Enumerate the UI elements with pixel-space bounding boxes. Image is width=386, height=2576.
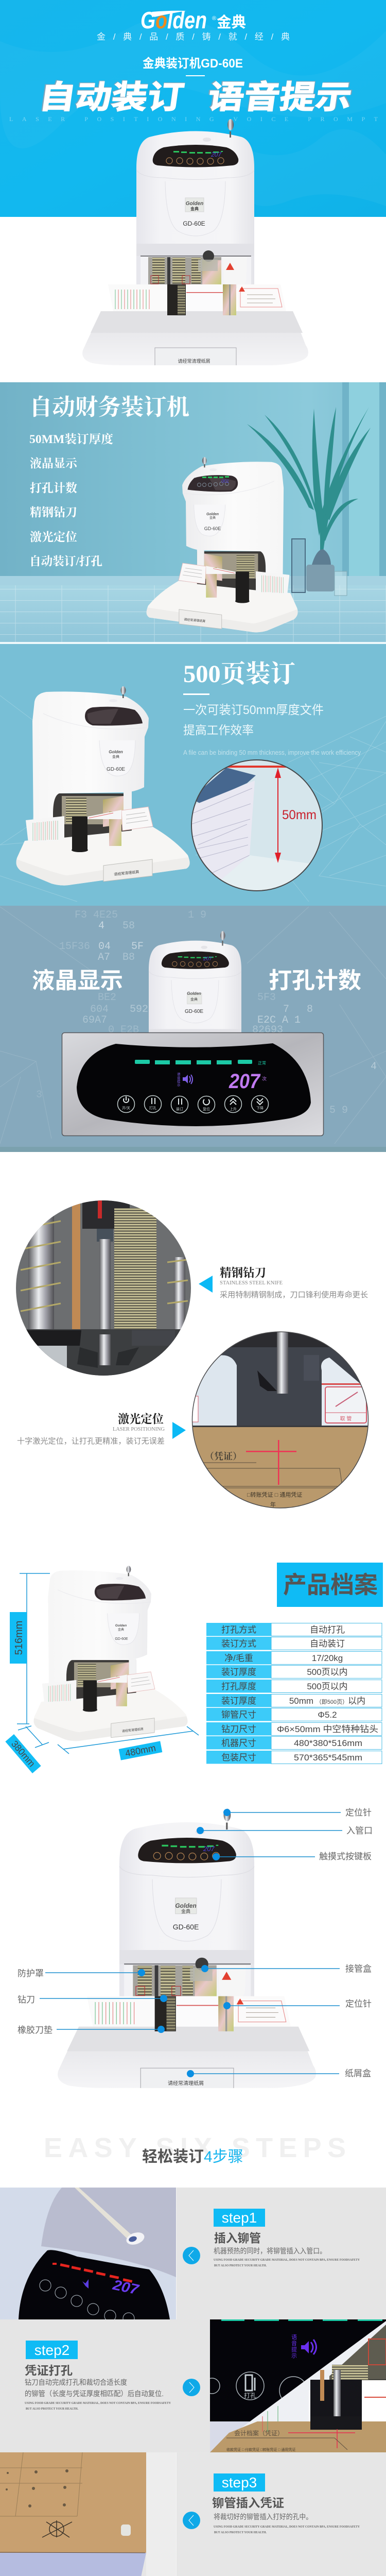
faint hex digits: E2C A 1 <box>257 1014 301 1026</box>
step 3 english: USING FOOD GRADE SECURITY GRADE MATERIAL, DOES NOT CONTAIN BPA, ENSURE FOODSAFETY <box>214 2525 360 2529</box>
step 1 photo: 207 <box>111 2277 141 2298</box>
control panel closeup: 正常 <box>258 1061 266 1065</box>
step 3 arrow <box>183 2512 200 2529</box>
machine three-quarter view: 金典 <box>209 516 216 520</box>
counter: 207 <box>229 1070 261 1093</box>
callouts <box>17 1808 373 2078</box>
faint hex digits: 82693 <box>252 1024 283 1036</box>
english subtitle: LASER POSITIONING VOICE PROMPT <box>9 115 378 123</box>
description <box>183 703 324 737</box>
callouts: 纸屑盒 <box>345 2069 371 2078</box>
machine front view: GD-60E <box>183 220 205 227</box>
machine three-quarter view: 001 <box>221 479 229 484</box>
feature list: 50MM装订厚度 <box>29 432 113 446</box>
spec table: 480*380*516mm <box>294 1738 362 1748</box>
step 2 arrow <box>183 2379 200 2396</box>
spec table: 装订厚度 <box>221 1667 256 1677</box>
machine large front: 请经常清理纸屑 <box>168 2080 204 2087</box>
feature list: 打孔计数 <box>30 482 77 495</box>
step 3 badge: step3 <box>222 2475 257 2490</box>
50mm thickness magnifier <box>190 759 324 891</box>
machine front clipped: 金典 <box>190 997 198 1002</box>
faint hex digits <box>36 909 377 1116</box>
faint hex digits: 1 9 <box>188 909 206 921</box>
faint hex digits: 5F <box>131 941 144 953</box>
laser photo circle: 年 <box>270 1501 276 1508</box>
faint hex digits: BE2 <box>98 992 116 1004</box>
feature: laser positioning <box>17 1332 369 1510</box>
step 2 photo: 音 <box>291 2340 297 2347</box>
spec table: 打孔方式 <box>221 1625 256 1635</box>
machine side view: Golden <box>109 750 123 754</box>
control panel closeup: 装订 <box>176 1107 183 1111</box>
machine side view: GD-60E <box>107 767 125 772</box>
step 1 photo <box>0 2188 176 2324</box>
panel: LCD display and hole counter: 打孔计数 <box>269 968 361 993</box>
machine three-quarter view: Golden <box>206 513 219 516</box>
step 1 title: 插入铆管 <box>214 2231 261 2245</box>
step 2 badge: step2 <box>34 2342 69 2358</box>
height dimension: 516mm <box>13 1621 25 1655</box>
step 1 english: USING FOOD GRADE SECURITY GRADE MATERIAL, DOES NOT CONTAIN BPA, ENSURE FOODSAFETY <box>214 2258 360 2262</box>
level bars <box>135 1060 252 1064</box>
panel: automatic binder scene <box>0 382 386 644</box>
spec table: 包装尺寸 <box>221 1753 256 1762</box>
machine side view: 金典 <box>112 754 119 759</box>
faint hex digits: 58 <box>122 920 135 932</box>
step 2 photo: 示 <box>291 2353 297 2359</box>
callouts: 接管盒 <box>345 1964 372 1974</box>
faint hex digits: 5F3 <box>257 992 276 1004</box>
machine front view <box>82 119 308 365</box>
step 3 english <box>214 2525 360 2534</box>
logo: Golden <box>141 7 207 33</box>
description: 采用特制精钢制成，刀口锋利使用寿命更长 <box>220 1290 368 1299</box>
spec table: 打孔厚度 <box>221 1682 256 1691</box>
callouts: 入管口 <box>346 1826 373 1836</box>
control panel closeup: 上升 <box>230 1107 237 1111</box>
faint hex digits: A7 <box>98 952 110 963</box>
step 2 english <box>25 2401 171 2411</box>
faint hex digits: 7 <box>283 1004 289 1015</box>
machine front clipped: Golden <box>187 991 201 996</box>
spec table: 净/毛重 <box>224 1653 253 1663</box>
laser photo circle: （凭证） <box>205 1451 242 1462</box>
step 2 description <box>25 2378 164 2398</box>
step 2 photo: 会计档案（凭证） <box>234 2429 284 2437</box>
laser photo circle <box>192 1332 369 1510</box>
machine three-quarter view: GD-60E <box>204 526 221 531</box>
control panel closeup: 次 <box>262 1076 267 1081</box>
product spec section <box>5 1563 383 1773</box>
spec table: Φ5.2 <box>318 1710 337 1720</box>
step 3 photo <box>0 2452 176 2576</box>
feature list: 自动装订/打孔 <box>29 555 102 568</box>
english: LASER POSITIONING <box>113 1426 165 1432</box>
main heading: 自动装订 <box>37 80 186 115</box>
spec table: 铆管尺寸 <box>221 1710 256 1720</box>
step 3 english: BUT ALSO PROTECT YOUR HEALTH. <box>214 2531 267 2534</box>
step 2 photo: 打孔 <box>244 2392 256 2399</box>
machine front view: 207 <box>210 151 222 158</box>
step 1 description: 机器预热的同时，将铆管插入入管口。 <box>214 2247 326 2255</box>
control panel closeup: 下降 <box>256 1106 264 1110</box>
faint hex digits: 8 <box>307 1004 313 1015</box>
spec table: 机器尺寸 <box>221 1738 256 1748</box>
machine large front: Golden <box>175 1902 197 1909</box>
control panel closeup: 复位 <box>203 1107 210 1111</box>
english: STAINLESS STEEL KNIFE <box>220 1280 283 1286</box>
panel: 500 page binding <box>0 644 386 906</box>
step 2 english: BUT ALSO PROTECT YOUR HEALTH. <box>26 2407 78 2411</box>
main heading: 语音提示 <box>206 80 354 115</box>
feature: laser positioning: 激光定位 <box>118 1413 164 1426</box>
machine large front <box>58 1808 316 2088</box>
stone pot <box>306 549 335 591</box>
step 2 photo <box>204 2319 386 2452</box>
spec table: 自动打孔 <box>310 1625 345 1635</box>
laser photo circle: □转账凭证 □ 通用凭证 <box>247 1491 302 1498</box>
spec title: 产品档案 <box>283 1571 378 1598</box>
feature list: 激光定位 <box>30 531 77 544</box>
parts diagram <box>17 1808 373 2088</box>
step 2 title: 凭证打孔 <box>25 2364 73 2377</box>
headings: 液晶显示 <box>32 968 123 993</box>
step 3 badge <box>214 2473 265 2492</box>
spec table: 570*365*545mm <box>294 1753 362 1762</box>
depth dimension <box>5 1726 49 1773</box>
step 2 description: 的铆管（长度与凭证厚度相匹配）后自动复位. <box>25 2389 164 2398</box>
scene title: 自动财务装订机 <box>29 395 189 420</box>
step 2 photo: 提 <box>291 2346 297 2353</box>
step 2 english: USING FOOD GRADE SECURITY GRADE MATERIAL, DOES NOT CONTAIN BPA, ENSURE FOODSAFETY <box>25 2401 171 2405</box>
drill photo circle <box>15 1200 191 1377</box>
feature list: 精钢钻刀 <box>30 506 77 519</box>
machine with dimensions: GD-60E <box>115 1637 128 1641</box>
step 1 <box>0 2188 386 2324</box>
buttons <box>117 1095 269 1113</box>
callouts: 防护罩 <box>17 1969 44 1978</box>
control panel closeup <box>62 1032 323 1136</box>
machine front view: Golden <box>186 201 203 207</box>
machine large front: 金典 <box>181 1908 190 1914</box>
width dimension <box>58 1726 199 1760</box>
faint hex digits: 04 <box>98 941 111 953</box>
machine with dimensions: 请经常清理纸屑 <box>121 1727 144 1733</box>
height dimension <box>10 1573 50 1724</box>
machine large front: GD-60E <box>173 1923 199 1931</box>
laser photo circle: 取 管 <box>340 1415 352 1422</box>
spec table: Φ6×50mm 中空特种钻头 <box>277 1724 378 1734</box>
hero banner <box>0 0 386 365</box>
step 2 description: 钻刀自动完成打孔和裁切合适长度 <box>25 2378 127 2386</box>
control panel closeup: 打孔 <box>149 1106 156 1110</box>
logo: ® <box>212 15 216 22</box>
step 1 arrow <box>183 2247 200 2264</box>
step 2 photo: 语 <box>291 2334 297 2341</box>
machine with dimensions: 金典 <box>118 1628 124 1632</box>
english note: A file can be binding 50 mm thickness, improve the work efficiency <box>183 749 361 756</box>
callouts: 钻刀 <box>17 1995 35 2005</box>
machine front clipped: GD-60E <box>185 1009 203 1014</box>
feature list <box>29 432 113 568</box>
spec table: 钻刀尺寸 <box>221 1724 256 1734</box>
steps heading: 轻松装订4步骤 <box>142 2148 243 2165</box>
spec table: 自动装订 <box>310 1639 345 1649</box>
control panel closeup: 开/关 <box>122 1106 130 1110</box>
product name: 金典装订机GD-60E <box>143 56 243 71</box>
machine front view: 金典 <box>190 206 199 211</box>
main heading: 自动装订 <box>36 79 186 115</box>
step 3 <box>0 2452 386 2576</box>
spec table: 500页以内 <box>307 1682 348 1691</box>
step 2 <box>0 2319 386 2452</box>
step 1 badge <box>214 2209 265 2227</box>
step 1 english <box>214 2258 360 2267</box>
spec table <box>206 1623 382 1764</box>
machine large front: 207 <box>203 1845 215 1853</box>
machine three-quarter view: 请经常清理纸屑 <box>184 617 205 623</box>
lantern <box>292 539 305 592</box>
step 1 english: BUT ALSO PROTECT YOUR HEALTH. <box>214 2264 267 2267</box>
machine three-quarter view <box>147 457 298 632</box>
depth dimension: 380mm <box>9 1739 37 1769</box>
feature title: 精钢钻刀 <box>220 1266 266 1279</box>
faint hex digits: 69A7 <box>82 1014 107 1026</box>
spec title <box>277 1563 383 1607</box>
faint hex digits: 592 <box>130 1004 148 1015</box>
spec table: 17/20kg <box>312 1653 343 1663</box>
faint hex digits: 3 <box>36 1089 42 1101</box>
faint hex digits: 0 E2B <box>108 1024 139 1036</box>
step 2 photo: 收款凭证 □ 付款凭证 □转账凭证 □ 通用凭证 <box>226 2447 295 2452</box>
width dimension: 480mm <box>125 1742 156 1759</box>
faint hex digits: 604 <box>90 1004 109 1015</box>
panel: LCD display and hole counter <box>0 906 386 1152</box>
faint hex digits: 4 <box>98 920 104 932</box>
machine side view <box>16 686 190 886</box>
faint hex digits: B8 <box>122 952 135 963</box>
step 2 badge <box>26 2341 78 2359</box>
spec table: 装订厚度 <box>221 1696 256 1706</box>
voice icon: 示 <box>177 1083 181 1087</box>
heading: 500页装订 <box>183 660 295 688</box>
machine front clipped: 207 <box>203 956 212 962</box>
description: 提高工作效率 <box>183 723 254 737</box>
callouts: 定位针 <box>345 1999 372 2009</box>
tagline: 金 / 典 / 品 / 质 / 铸 / 就 / 经 / 典 <box>97 32 290 42</box>
arrow <box>199 1276 213 1293</box>
voice icon <box>177 1072 192 1087</box>
description: 十字激光定位，让打孔更精准，装订无误差 <box>17 1437 165 1446</box>
glass <box>335 571 347 596</box>
feature: steel drill <box>15 1200 368 1377</box>
machine side view: 请经常清理纸屑 <box>114 869 139 877</box>
feature list: 液晶显示 <box>30 457 78 470</box>
spec table: 500页以内 <box>307 1667 348 1677</box>
faint hex digits: 15F36 <box>59 941 90 953</box>
callouts: 定位针 <box>345 1808 372 1818</box>
machine with dimensions: Golden <box>115 1624 127 1628</box>
voice icon: 音 <box>177 1075 181 1080</box>
callouts: 橡胶刀垫 <box>17 2025 52 2035</box>
faint hex digits: 5 9 <box>329 1105 348 1116</box>
step 1 badge: step1 <box>222 2210 257 2226</box>
step 3 description: 将裁切好的铆管插入打好的孔中。 <box>214 2513 312 2521</box>
machine with dimensions <box>33 1566 188 1741</box>
spec table: 50mm （即500页）以内 <box>289 1696 365 1706</box>
machine front view: 请经常清理纸屑 <box>178 358 210 364</box>
50mm thickness magnifier: 50mm <box>282 808 317 822</box>
voice icon: 语 <box>177 1072 181 1076</box>
arrow <box>172 1422 186 1439</box>
faint hex digits: 4 <box>371 1061 377 1073</box>
voice icon: 提 <box>177 1079 181 1083</box>
step 3 title: 铆管插入凭证 <box>212 2496 284 2510</box>
callouts: 触摸式按键板 <box>319 1852 372 1861</box>
spec table: 装订方式 <box>221 1639 256 1649</box>
steps heading: EASY SIX STEPS <box>44 2132 346 2163</box>
plant <box>247 407 371 567</box>
main heading <box>36 79 355 115</box>
main heading: 语音提示 <box>205 79 355 115</box>
faint hex digits: F3 4E25 <box>75 909 118 921</box>
machine front clipped <box>148 931 242 1032</box>
logo: 金典 <box>217 14 246 31</box>
description: 一次可装订50mm厚度文件 <box>183 703 324 717</box>
